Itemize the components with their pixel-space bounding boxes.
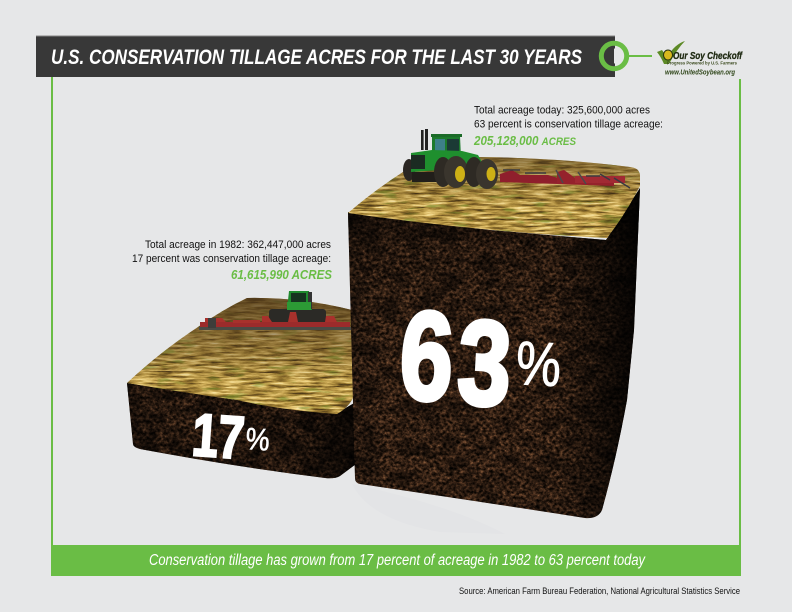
stat: 63% [397, 284, 563, 432]
callout: 1982: 17 percent was conservation tillage acreage: [132, 253, 331, 265]
callout: today: 205,128,000 ACRES [473, 133, 577, 148]
small soil block 1982 [120, 290, 360, 485]
stat: 63%: % [514, 329, 563, 400]
large tractor [403, 129, 498, 189]
stat: 17%: 17 [190, 401, 247, 472]
callout: today: 63 percent is conservation tillage acreage: [474, 118, 663, 130]
source note: Source: American Farm Bureau Federation, National Agricultural Statistics Service [459, 586, 740, 596]
stat: 17%: % [245, 421, 271, 458]
icon: soybean [664, 50, 672, 60]
logo: Our Soy Checkoff [657, 41, 743, 76]
callout: today [473, 104, 663, 148]
ground shadow [352, 484, 505, 534]
cultivator [500, 170, 630, 188]
logo: Our Soy Checkoff: www.UnitedSoybean.org [665, 68, 735, 76]
large soil block today [345, 129, 645, 525]
icon: green check mark [657, 41, 685, 64]
callout: 1982: 61,615,990 ACRES [231, 267, 332, 282]
field surface [348, 157, 640, 238]
field surface [127, 298, 353, 414]
logo: Our Soy Checkoff: Progress Powered by U.S. Farmers [667, 60, 737, 66]
soil face [127, 383, 355, 478]
soil face [345, 185, 645, 525]
summary banner [51, 545, 741, 576]
green content frame [52, 77, 740, 546]
logo: Our Soy Checkoff: Our Soy Checkoff [673, 51, 743, 62]
callout: 1982 [132, 239, 332, 282]
summary banner: Conservation tillage has grown from 17 percent of acreage in 1982 to 63 percent today [149, 552, 646, 569]
stat: 63%: 6 [397, 284, 457, 428]
ring connector to logo [601, 43, 652, 69]
callout: today: Total acreage today: 325,600,000 acres [474, 104, 650, 116]
callout: 1982: Total acreage in 1982: 362,447,000 acres [145, 239, 331, 251]
small tractor and cultivator [199, 291, 352, 330]
title bar [36, 36, 615, 77]
title: U.S. CONSERVATION TILLAGE ACRES FOR THE LAST 30 YEARS [51, 46, 582, 69]
stat: 63%: 3 [455, 295, 515, 432]
